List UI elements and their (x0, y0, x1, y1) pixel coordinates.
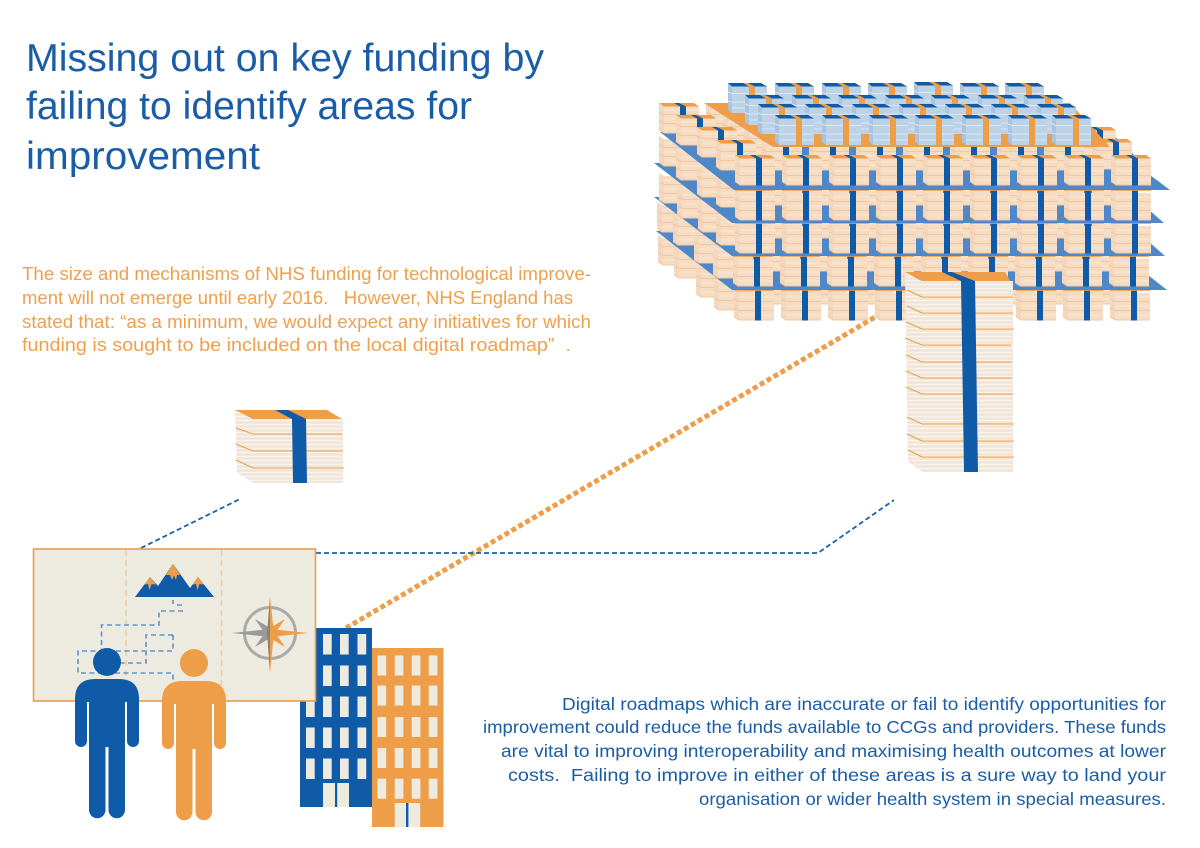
dashed route (78, 600, 183, 682)
tier 1 rear stacks (659, 103, 1132, 170)
title: Missing out on key funding by (26, 37, 545, 80)
person: orange (162, 649, 226, 820)
dashed blue connector to small stack (141, 499, 240, 548)
blue stacks on top (728, 82, 1091, 145)
closing text block: Digital roadmaps which are inaccurate or fail to identify opportunities for (562, 694, 1166, 714)
person: blue (75, 648, 139, 818)
tier 2 of paper stacks (659, 136, 1151, 220)
tier 4 of paper stacks (657, 202, 1149, 286)
icon: compass (232, 597, 308, 673)
closing text block: are vital to improving interoperability and maximising health outcomes at lower (501, 741, 1166, 761)
closing text block: organisation or wider health system in special measures. (699, 789, 1166, 809)
intro text block: funding is sought to be included on the local digital roadmap” . (22, 334, 571, 355)
bottom tier of paper stacks (658, 235, 1150, 320)
shelf 1 (660, 132, 1170, 190)
shelf 2 (654, 163, 1164, 223)
tier 1 front stacks (735, 155, 1151, 186)
orange top plate (704, 103, 1110, 147)
icon: mountains (135, 564, 214, 597)
closing text block: costs. Failing to improve in either of these areas is a sure way to land your (508, 765, 1166, 785)
title: improvement (26, 135, 260, 178)
intro text block: stated that: “as a minimum, we would expect any initiatives for which (22, 311, 591, 332)
title (26, 37, 545, 178)
shelf 3 (654, 197, 1165, 256)
small paper stack (235, 410, 344, 483)
orange building (372, 648, 444, 827)
dotted orange line from building to money (346, 316, 877, 628)
closing text block: improvement could reduce the funds available to CCGs and providers. These funds (483, 717, 1166, 737)
tier 3 of paper stacks (659, 173, 1151, 254)
intro text block: ment will not emerge until early 2016. However, NHS England has (22, 287, 573, 308)
closing text block (483, 694, 1166, 809)
tall paper stack (905, 272, 1014, 472)
blue building (300, 628, 372, 807)
large money pile on shelves (654, 82, 1170, 320)
dashed blue connector to tall stack (316, 500, 894, 553)
shelf 4 (656, 231, 1167, 290)
intro text block: The size and mechanisms of NHS funding for technological improve- (22, 263, 591, 284)
intro text block (22, 263, 591, 355)
map (34, 549, 316, 701)
title: failing to identify areas for (26, 85, 472, 128)
